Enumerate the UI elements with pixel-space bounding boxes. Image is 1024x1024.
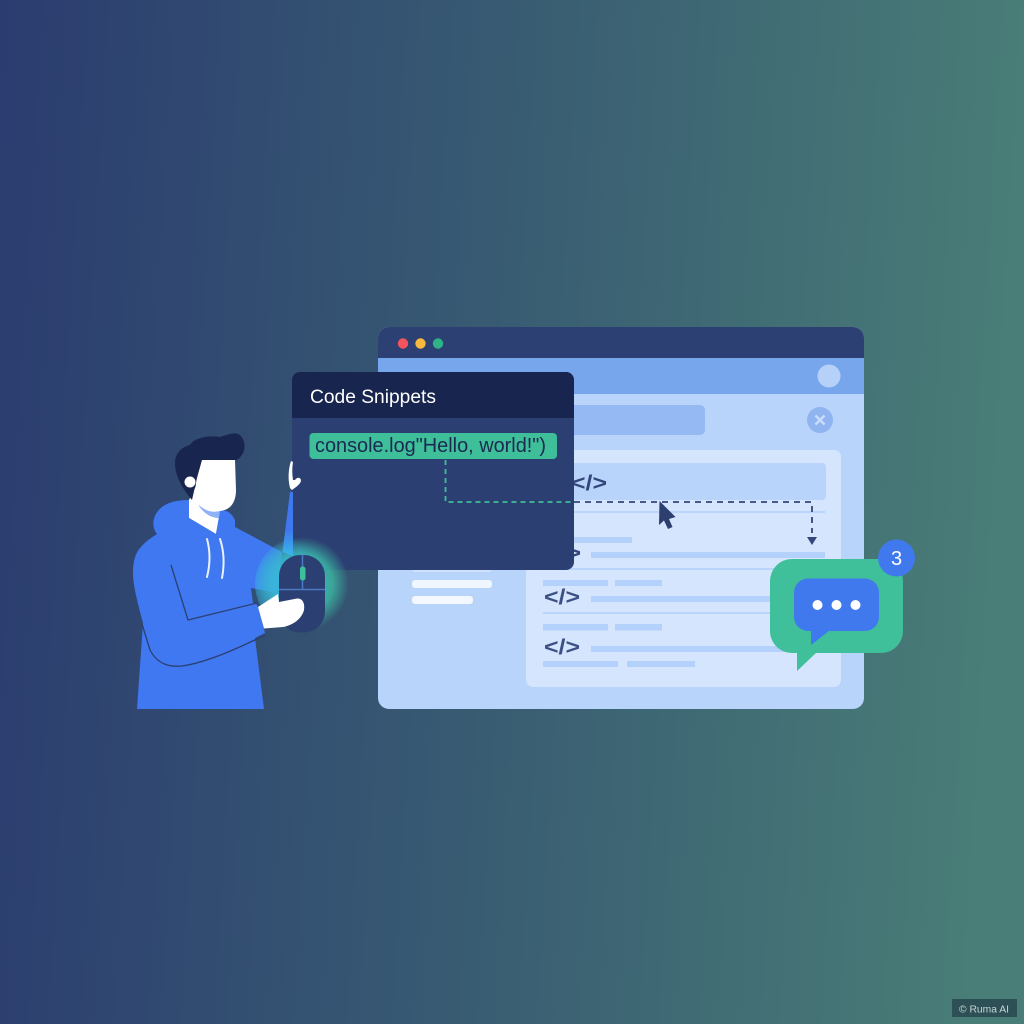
- hair: [175, 433, 245, 500]
- window control dots: [398, 338, 443, 349]
- neck: [189, 484, 220, 534]
- notification badge: [878, 540, 915, 576]
- hoodie strings: [207, 539, 224, 578]
- panel title: Code Snippets: [310, 387, 436, 408]
- search bar: [540, 405, 705, 435]
- cursor arrow: [659, 501, 676, 529]
- sidebar text lines: [412, 564, 492, 604]
- code icon row 3: </>: [544, 586, 580, 609]
- ear: [184, 476, 196, 488]
- browser window: [378, 327, 864, 709]
- browser content area: [378, 327, 864, 709]
- row divider lines: [540, 511, 825, 614]
- hoodie: [133, 500, 282, 709]
- person: [133, 433, 282, 709]
- mouse divider lines: [279, 555, 325, 590]
- mouse glow: [255, 537, 349, 631]
- inner message bubble: [794, 578, 879, 645]
- toolbar avatar circle: [818, 364, 840, 388]
- pointing finger: [289, 461, 301, 490]
- code chip: [310, 433, 557, 459]
- glow left tint: [255, 537, 349, 631]
- arrow head: [807, 537, 817, 545]
- badge number: 3: [891, 548, 902, 570]
- browser toolbar: [378, 358, 864, 394]
- close button: [807, 407, 833, 433]
- watermark: [952, 999, 1017, 1017]
- green dashed connector: [446, 460, 574, 502]
- code snippets panel: [292, 372, 574, 570]
- collar shadow: [198, 504, 220, 518]
- mouse wheel: [300, 566, 306, 580]
- code list panel: [526, 450, 841, 687]
- mouse: [279, 555, 325, 632]
- code icon row 4: </>: [544, 636, 580, 659]
- browser title bar: [378, 327, 864, 358]
- panel header: [292, 372, 574, 418]
- typing dots: [812, 600, 860, 610]
- face: [195, 460, 236, 511]
- chat bubble: [770, 540, 915, 671]
- dashed connector to drop target: [574, 502, 812, 533]
- watermark: © Ruma AI: [959, 1004, 1009, 1016]
- highlighted code row: [540, 463, 826, 500]
- code icon row 1: </>: [571, 472, 607, 495]
- code text: console.log"Hello, world!"): [315, 434, 546, 457]
- code icon row 2: </>: [545, 542, 581, 565]
- row placeholders: [543, 537, 825, 667]
- sleeve outlines: [142, 565, 265, 666]
- raised wire arm: [282, 492, 293, 556]
- hand on mouse: [258, 594, 304, 628]
